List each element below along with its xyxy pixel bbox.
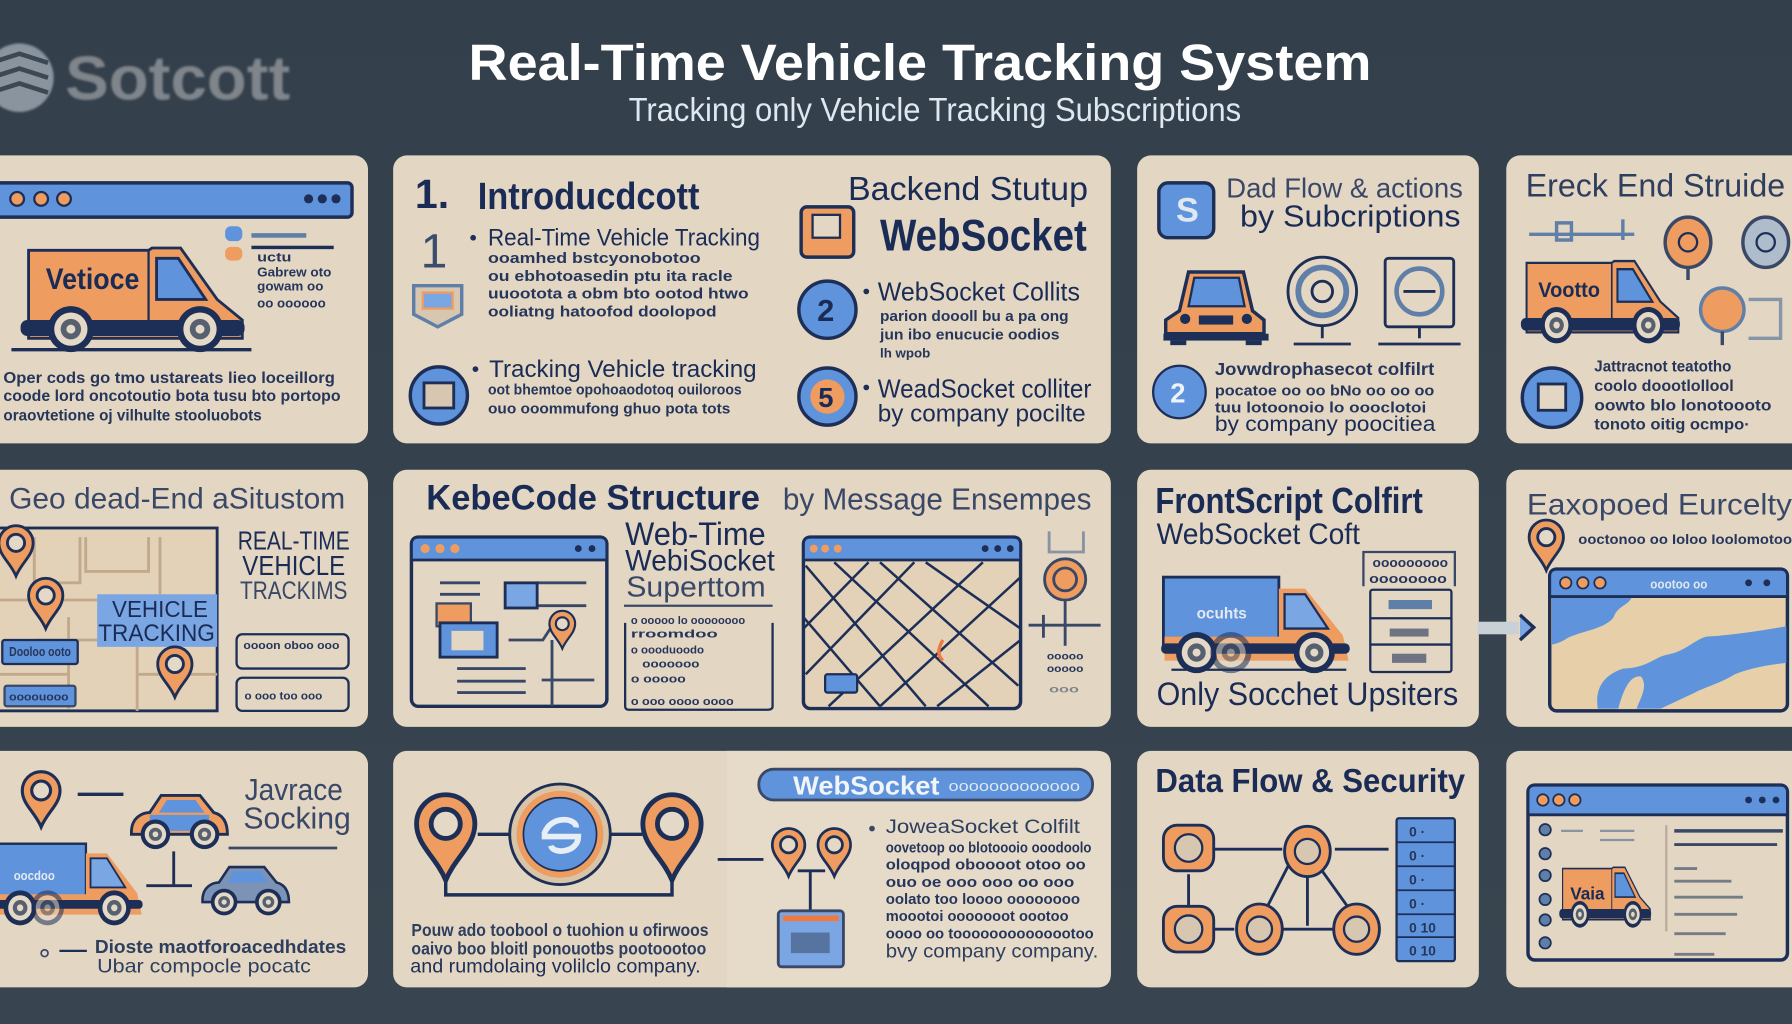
- map: [0, 526, 217, 711]
- panel: data flow and security: [1137, 751, 1479, 987]
- websocket pill: ooooooooooooo: [949, 779, 1080, 795]
- heading: FrontScript Colfirt: [1155, 480, 1423, 521]
- text block: Jovwdrophasecot colfilrt: [1215, 359, 1435, 379]
- side icons: ooooo: [1047, 664, 1083, 675]
- bullet: websocket client: parion doooll bu a pa ong: [880, 309, 1069, 325]
- description: oaivo boo bloitl ponouotbs pootoootoo: [411, 938, 706, 958]
- bullet: tracking vehicle tracking: Tracking Vehicle tracking: [489, 356, 757, 383]
- text block: tonoto oitig ocmpo·: [1594, 417, 1750, 434]
- bullet list: oloqpod oboooot otoo oo: [886, 858, 1086, 874]
- bullet: real-time vehicle tracking: ooliatng hatoofod doolopod: [488, 305, 717, 321]
- icon: second car: [203, 867, 289, 915]
- side icons: [1029, 531, 1101, 696]
- heading: Dad Flow & actions: [1226, 173, 1463, 204]
- heading: websocket: WebSocket: [880, 211, 1087, 260]
- description: and rumdolaing volilclo company.: [410, 956, 701, 978]
- legend list: Gabrew oto: [257, 266, 332, 280]
- side heading: [238, 526, 350, 605]
- heading: Javrace: [245, 772, 343, 807]
- text block: by company poocitiea: [1215, 411, 1436, 436]
- icon: orange van: Vootto: [1538, 277, 1600, 302]
- subheading: WebSocket Coft: [1157, 518, 1361, 551]
- bullet list: ouo oe ooo ooo oo ooo: [886, 875, 1074, 891]
- bullet: real-time vehicle tracking: ooamhed bstcyonobotoo: [488, 251, 701, 267]
- icon: pin: [22, 772, 60, 827]
- browser diagram: [411, 537, 607, 706]
- list box: o ooo oooo oooo: [631, 696, 734, 708]
- bullet: websocket client: WebSocket Collits: [878, 277, 1080, 307]
- text block: oowto blo lonotoooto: [1594, 397, 1772, 414]
- browser bar: [0, 183, 352, 217]
- heading: [229, 772, 351, 848]
- panel: websocket connections: [393, 751, 1111, 987]
- heading: websocket subscription: Web-Time: [625, 516, 766, 552]
- bullet: websocket client: [863, 277, 1080, 361]
- heading: [426, 478, 1091, 518]
- text block: Jattracnot teatotho: [1594, 358, 1732, 375]
- icon: orange van: Vetioce: [46, 263, 139, 296]
- blue labels: [2, 640, 78, 706]
- server column: 0 10: [1409, 921, 1436, 936]
- map: TRACKING: [98, 620, 215, 647]
- icon: circular document: [1522, 368, 1582, 427]
- heading: websocket subscription: Superttom: [626, 572, 766, 604]
- panel: expanded security map: [1506, 470, 1792, 727]
- heading: [1226, 173, 1463, 233]
- icon: pin: [1529, 520, 1563, 570]
- server column: 0 ·: [1409, 849, 1425, 864]
- bullet list: oovetoop oo blotoooio ooodoolo: [886, 841, 1091, 857]
- badge: 5: [799, 368, 856, 425]
- note box: oooooooo: [1369, 572, 1447, 586]
- icon: van: [1559, 867, 1651, 928]
- icon: circular document: [410, 367, 467, 424]
- title: Real-Time Vehicle Tracking System: [469, 33, 1371, 91]
- text block: [1215, 359, 1436, 436]
- network diagram: [1163, 825, 1389, 954]
- heading: introduction: Introducdcott: [478, 175, 700, 217]
- description: Oper cods go tmo ustareats lieo loceillorg: [3, 370, 335, 387]
- icon: target: [1288, 257, 1357, 344]
- server column: 0 ·: [1409, 897, 1425, 912]
- list box: o oooduoodo: [631, 645, 704, 657]
- bullet list: moootoi ooooooot oootoo: [886, 909, 1069, 925]
- bullet: websocket client: jun ibo enucucie oodios: [879, 327, 1059, 343]
- panel: data flow and actions: [1137, 155, 1479, 443]
- description: oraovtetione oj vilhulte stooluobots: [3, 408, 262, 425]
- icon: truck: oocdoo: [14, 869, 55, 883]
- icon: orange van: [1521, 261, 1680, 343]
- bullet: real-time vehicle tracking: Real-Time Vehicle Tracking: [488, 225, 760, 252]
- side icons: ooo: [1049, 685, 1079, 696]
- caption: Only Socchet Upsiters: [1157, 676, 1458, 712]
- server column: [1397, 818, 1455, 961]
- icon: square target: [1378, 258, 1461, 344]
- map browser: [803, 537, 1021, 709]
- arrow: [1478, 615, 1534, 640]
- heading: introduction: 1.: [415, 171, 449, 217]
- blue labels: Dooloo ooto: [9, 645, 71, 659]
- bullet list: JoweaSocket Colfilt: [886, 816, 1081, 838]
- heading: Geo dead-End aSitustom: [9, 483, 345, 516]
- bullet: real-time vehicle tracking: ou ebhotoasedin ptu ita racle: [488, 269, 733, 285]
- description: Pouw ado toobool o tuohion u ofirwoos: [411, 920, 709, 940]
- heading: by Message Ensempes: [783, 482, 1091, 517]
- bullet list: [869, 816, 1098, 963]
- heading: introduction: [415, 171, 700, 217]
- list box: [625, 615, 773, 710]
- note box: [1363, 552, 1455, 586]
- browser window: [1528, 785, 1787, 960]
- icon: small pins and server: [718, 828, 851, 967]
- bullet: tracking vehicle tracking: oot bhemtoe opohoaodotoq ouiloroos: [488, 382, 742, 398]
- legend list: uctu: [257, 251, 291, 265]
- text block: [1594, 358, 1772, 434]
- icon: orange van: [11, 248, 251, 352]
- icon: van: Vaia: [1570, 883, 1605, 903]
- icon: location badges: [1665, 217, 1789, 345]
- server column: 0 10: [1409, 943, 1436, 958]
- caption: ooctonoo oo Ioloo Ioolomotoo: [1578, 532, 1792, 547]
- map browser: [1550, 569, 1787, 711]
- list box: o ooooo: [631, 673, 686, 685]
- icon: car front: [1163, 272, 1269, 345]
- heading: Ereck End Struide: [1526, 168, 1785, 204]
- icon: connected pins with hub: [417, 784, 701, 895]
- caption: Ubar compocle pocatc: [97, 956, 311, 978]
- panel: introduction and backend setup: [393, 155, 1111, 443]
- bullet: websocket client: lh wpob: [880, 347, 931, 361]
- blue labels: oooouooo: [9, 692, 69, 704]
- server column: 0 ·: [1409, 825, 1425, 840]
- side heading: REAL-TIME: [238, 526, 350, 556]
- logo: Sotcott: [65, 44, 290, 113]
- panel: map and real-time tracking: [0, 470, 368, 727]
- bullet: websocket client by company: [863, 374, 1092, 428]
- heading: Data Flow & Security: [1155, 763, 1466, 800]
- bullet: real-time vehicle tracking: uuootota a obm bto ootod htwo: [488, 286, 749, 302]
- icon: car: [78, 794, 227, 849]
- list box: ooooooo: [642, 658, 699, 670]
- bullet: websocket client by company: by company pocilte: [878, 401, 1086, 428]
- text block: pocatoe oo oo bNo oo oo oo: [1215, 383, 1434, 399]
- side heading: VEHICLE: [242, 550, 345, 581]
- bullet list: oolato too loooo oooooooo: [886, 892, 1080, 908]
- icon: delivery truck: [1161, 577, 1350, 673]
- icon: blue s badge: S: [1176, 192, 1199, 230]
- stacked rows: [1370, 590, 1451, 672]
- connector: [146, 851, 192, 886]
- panel: javascript socket vehicles: [0, 751, 368, 987]
- bullet: tracking vehicle tracking: [473, 356, 757, 418]
- bullet list: bvy company company.: [886, 941, 1098, 963]
- websocket pill: [759, 769, 1093, 800]
- panel: back end structure: [1506, 155, 1792, 443]
- info boxes: o ooo too ooo: [245, 690, 322, 702]
- legend list: oo oooooo: [257, 296, 326, 310]
- legend list: [225, 226, 334, 310]
- heading: Eaxopoed Eurcelty: [1527, 488, 1792, 521]
- heading: KebeCode Structure: [426, 478, 760, 518]
- bullet: real-time vehicle tracking: [470, 225, 760, 321]
- caption: [41, 936, 346, 978]
- info boxes: oooon oboo ooo: [243, 640, 339, 652]
- panel: code structure: [393, 470, 1111, 727]
- bullet list: oooo oo toooooooooooootoo: [886, 926, 1094, 942]
- caption: Dioste maotforoacedhdates: [95, 936, 346, 957]
- icon: number one badge: [414, 225, 462, 327]
- heading: Socking: [243, 801, 351, 836]
- heading: backend setup: Backend Stutup: [848, 171, 1088, 208]
- badge: 5: 5: [818, 382, 834, 413]
- description: [410, 920, 709, 978]
- list box: rroomdoo: [631, 629, 718, 641]
- badge: 2: [799, 281, 856, 338]
- heading: websocket subscription: [624, 516, 776, 606]
- list box: o ooooo lo oooooooo: [631, 615, 745, 627]
- text block: tuu lotoonoio lo oooclotoi: [1215, 401, 1426, 417]
- text block: coolo doootlollool: [1594, 378, 1734, 395]
- side icons: ooooo: [1047, 651, 1083, 662]
- heading: websocket subscription: WebiSocket: [625, 544, 776, 577]
- icon: truck: [0, 844, 143, 925]
- bullet: tracking vehicle tracking: ouo ooommufong ghuo pota tots: [488, 402, 730, 418]
- side heading: TRACKIMS: [240, 577, 347, 605]
- heading: by Subcriptions: [1240, 198, 1461, 233]
- subtitle: Tracking only Vehicle Tracking Subscriptions: [629, 92, 1241, 129]
- icon: delivery truck: ocuhts: [1197, 605, 1247, 622]
- websocket pill: WebSocket: [793, 770, 940, 800]
- icon: blue badge: 2: [1170, 377, 1186, 408]
- icon: blue s badge: [1159, 183, 1214, 238]
- panel: dashboard: [1506, 751, 1792, 987]
- icon: blue badge: [1153, 366, 1206, 418]
- description: [3, 370, 341, 425]
- legend list: gowam oo: [257, 279, 324, 293]
- connector sketch: [1529, 219, 1634, 240]
- map browser: oootoo oo: [1650, 578, 1708, 592]
- badge: 2: 2: [817, 293, 834, 328]
- note box: ooooooooo: [1373, 556, 1448, 570]
- panel: vehicle overview: [0, 155, 368, 443]
- icon: orange file: [801, 207, 854, 257]
- icon: number one badge: 1: [421, 225, 447, 278]
- panel: frontend client: [1137, 470, 1479, 727]
- server column: 0 ·: [1409, 873, 1425, 888]
- description: coode lord oncotoutio bota tusu bto portopo: [3, 388, 341, 405]
- map: VEHICLE: [112, 596, 208, 622]
- info boxes: [237, 634, 349, 711]
- bullet: websocket client by company: WeadSocket colliter: [878, 374, 1092, 404]
